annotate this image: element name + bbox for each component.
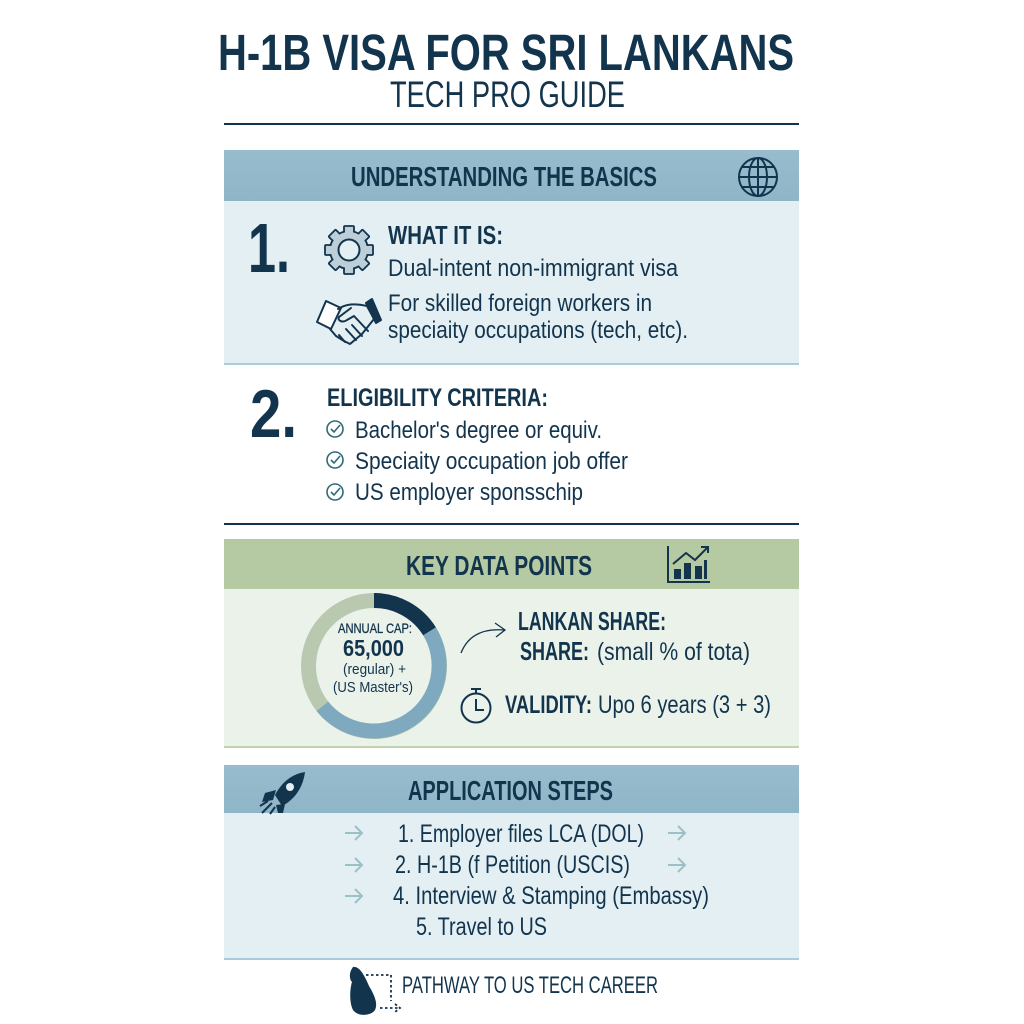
icon: handshake: [317, 299, 381, 344]
footer: pathway to US tech career: PATHWAY TO US TECH CAREER: [402, 972, 658, 999]
text: lankan share: LANKAN SHARE:: [518, 606, 666, 636]
number 2: 2.: [250, 376, 297, 452]
arrows: left column: [345, 826, 362, 903]
block: eligibility criteria: US employer sponsschip: [355, 479, 583, 506]
heading: application steps: [224, 765, 799, 813]
text: lankan share: SHARE:: [520, 636, 589, 666]
text: steps list: 1. Employer files LCA (DOL): [398, 820, 644, 848]
text: what it is: WHAT IT IS:: [388, 220, 503, 250]
text: steps list: 2. H-1B (f Petition (USCIS): [395, 851, 630, 879]
block: eligibility criteria: Bachelor's degree or equiv.: [355, 417, 602, 444]
donut chart: annual cap: 65,000: [343, 635, 404, 661]
heading: application steps: APPLICATION STEPS: [408, 775, 613, 806]
title: H-1B VISA FOR SRI LANKANS: [218, 24, 794, 81]
arrows: right column: [668, 826, 685, 872]
text: steps list: [393, 820, 709, 941]
block: eligibility criteria: [327, 384, 628, 506]
icon: check 3: [327, 484, 343, 500]
title: [218, 24, 794, 115]
heading: understanding the basics: [224, 150, 799, 201]
text: what it is: Dual-intent non-immigrant visa: [388, 255, 679, 282]
icon: stopwatch: [462, 689, 490, 722]
block: eligibility criteria: Speciaity occupation job offer: [355, 448, 628, 475]
donut chart: annual cap: (regular) +: [343, 661, 406, 678]
text: validity: [505, 691, 771, 719]
subtitle: TECH PRO GUIDE: [390, 74, 625, 115]
heading: key data points: [224, 539, 799, 589]
number 1: 1.: [248, 209, 290, 287]
arrow: curved: [461, 623, 505, 653]
icon: check 2: [327, 452, 343, 468]
text: validity: VALIDITY:: [505, 691, 592, 719]
donut chart: annual cap: [308, 600, 440, 732]
text: steps list: 5. Travel to US: [416, 913, 547, 941]
text: what it is: [388, 220, 688, 344]
donut chart: annual cap: ANNUAL CAP:: [338, 620, 412, 636]
icon: check 1: [327, 421, 343, 437]
icon: gear: [325, 226, 373, 274]
icon: Sri Lanka map with dotted path: [350, 967, 400, 1015]
icon: growth chart: [668, 546, 710, 582]
text: steps list: 4. Interview & Stamping (Embassy): [393, 882, 709, 910]
block: eligibility criteria: ELIGIBILITY CRITERIA:: [327, 384, 548, 412]
text: lankan share: [518, 606, 750, 666]
text: validity: Upo 6 years (3 + 3): [598, 691, 771, 719]
text: what it is: For skilled foreign workers in: [388, 290, 652, 317]
heading: key data points: KEY DATA POINTS: [406, 550, 592, 581]
panel: application steps: [224, 765, 799, 960]
panel: key data points: [224, 539, 799, 748]
text: lankan share: (small % of tota): [597, 638, 750, 666]
donut chart: annual cap: (US Master's): [333, 679, 413, 696]
panel: understanding the basics: [224, 150, 799, 452]
footer: pathway to US tech career: [350, 967, 658, 1015]
heading: understanding the basics: UNDERSTANDING THE BASICS: [351, 161, 657, 192]
text: what it is: speciaity occupations (tech, etc).: [388, 317, 688, 344]
icon: globe: [739, 158, 777, 196]
icon: rocket: [260, 772, 305, 814]
